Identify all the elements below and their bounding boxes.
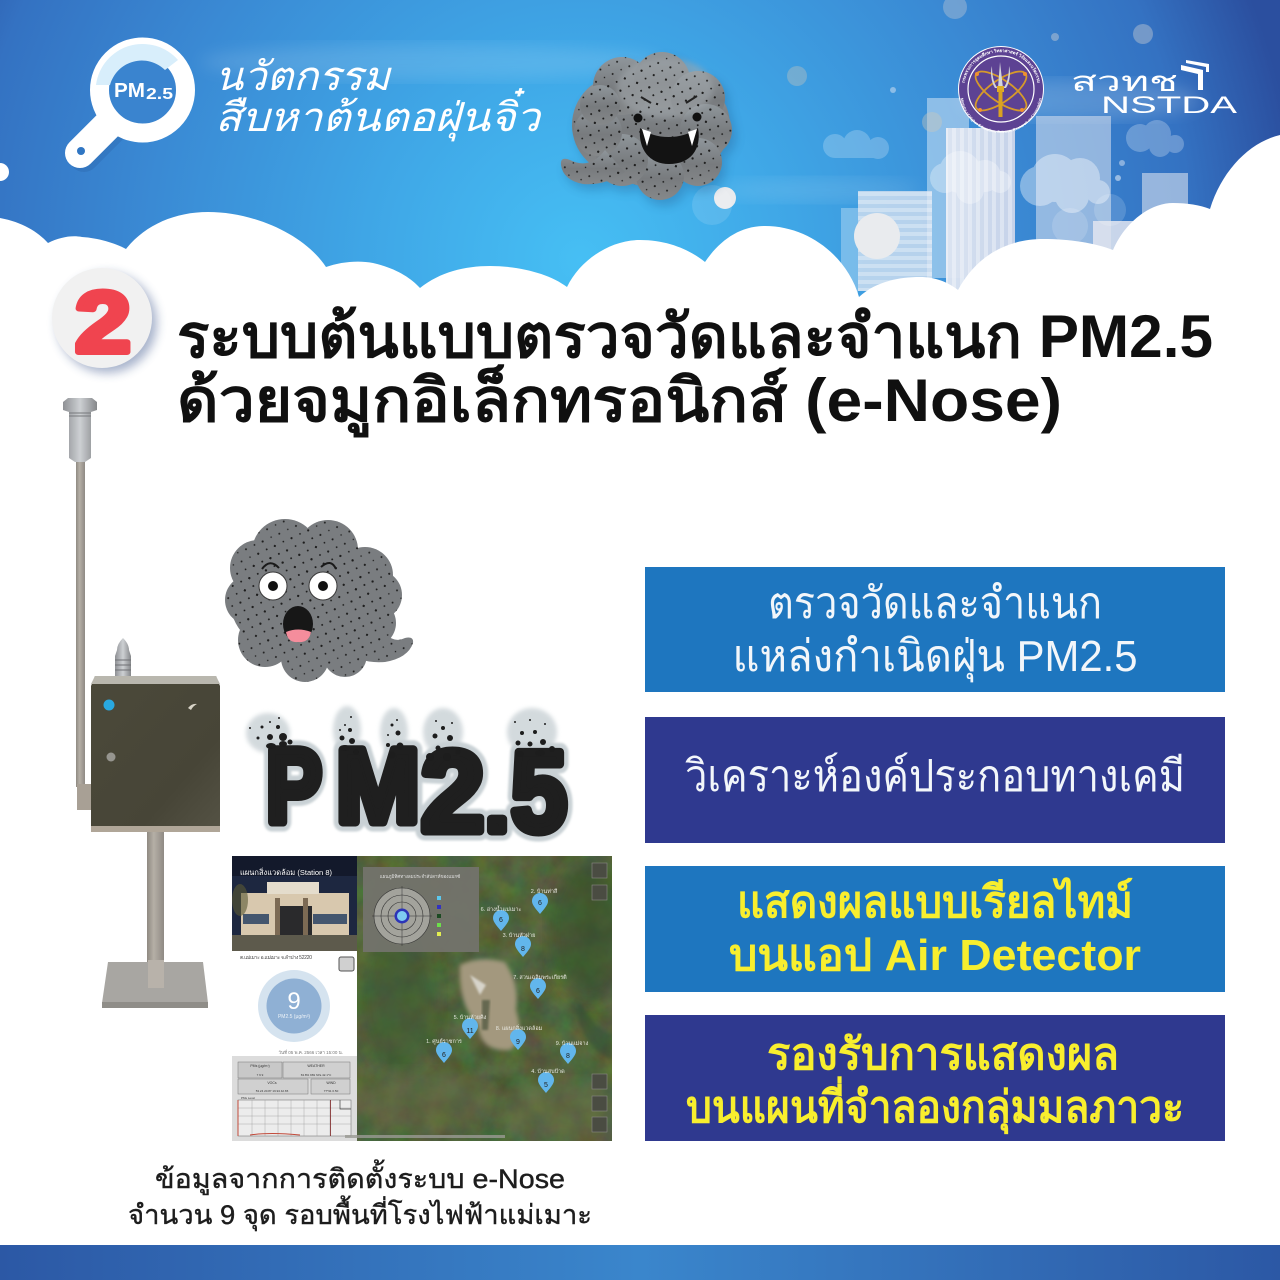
feature box: measure and classify: แหล่งกำเนิดฝุ่น PM2.5 [732, 632, 1138, 683]
header title: สืบหาต้นตอฝุ่นจิ๋ว [215, 88, 543, 142]
map satellite view [350, 856, 630, 1141]
photo caption: จำนวน 9 จุด รอบพื้นที่โรงไฟฟ้าแม่เมาะ [128, 1195, 592, 1232]
feature box: simulation map [645, 1015, 1225, 1141]
main heading: ด้วยจมูกอิเล็กทรอนิกส์ (e-Nose) [177, 364, 1062, 438]
map pins: 6 [536, 988, 540, 995]
bottom band [0, 1245, 1280, 1280]
map pins: 6 [442, 1052, 446, 1059]
map pins: 6 [538, 900, 542, 907]
PM2.5 reading panel: ต.แม่เมาะ อ.แม่เมาะ จ.ลำปาง 52220 [240, 955, 312, 961]
map scrollbar [345, 1135, 505, 1138]
sensor chart panel: VOCs [267, 1081, 277, 1085]
main heading [177, 303, 1213, 438]
map pins [426, 888, 589, 1093]
NSTDA logo: สวทช [1071, 66, 1178, 97]
sensor chart panel [232, 1056, 357, 1141]
wind rose panel [363, 867, 479, 952]
map pins: 7. สวนเฉลิมพระเกียรติ [513, 974, 567, 981]
surprised dust cloud mascot [225, 519, 413, 682]
map pins: 2. บ้านท่าสี [531, 888, 558, 895]
map pins: 4. บ้านสบป้าด [531, 1068, 565, 1075]
feature box: measure and classify [645, 567, 1225, 692]
PM2.5 graphic lettering: M [336, 728, 420, 845]
ministry seal logo: กระทรวงการอุดมศึกษา วิทยาศาสตร์ วิจัยและนวัตกรรม [962, 48, 1040, 83]
PM2.5 graphic lettering: 2 [421, 729, 484, 856]
map pins: 6 [499, 917, 503, 924]
magnifier logo [77, 44, 186, 157]
header title: นวัตกรรม [215, 55, 393, 99]
PM2.5 graphic lettering: P [266, 728, 322, 845]
PM2.5 graphic lettering: 5 [511, 729, 567, 856]
station photo: แผนกสิ่งแวดล้อม (Station 8) [240, 867, 332, 877]
PM2.5 graphic lettering [246, 706, 567, 856]
PM2.5 reading panel [232, 951, 357, 1056]
wind rose panel: แผนภูมิทิศทางลมประจำสัปดาห์ของแมกซ์ [380, 873, 460, 880]
e-Nose device photo [63, 398, 220, 1008]
NSTDA logo [1071, 60, 1237, 119]
station photo [232, 856, 357, 951]
PM2.5 graphic lettering: . [486, 759, 508, 848]
photo caption: ข้อมูลจากการติดตั้งระบบ e-Nose [155, 1159, 565, 1195]
dashboard screenshot [232, 856, 630, 1141]
photo caption [128, 1159, 592, 1232]
magnifier logo: PM [114, 80, 145, 102]
map pins: 8 [566, 1053, 570, 1060]
PM2.5 graphic lettering: P [266, 728, 322, 845]
feature box: realtime app: บนแอป Air Detector [729, 931, 1141, 980]
header title [215, 55, 543, 142]
map pins: 8. แผนกสิ่งแวดล้อม [496, 1024, 543, 1032]
feature box: realtime app [645, 866, 1225, 992]
number badge 2: 2 [75, 275, 131, 371]
feature box: realtime app: แสดงผลแบบเรียลไทม์ [737, 876, 1133, 927]
map pins: 5. บ้านห้วยคิง [454, 1014, 487, 1021]
NSTDA logo: NSTDA [1101, 92, 1237, 119]
magnifier logo: 2.5 [146, 86, 173, 103]
main heading: ระบบต้นแบบตรวจวัดและจำแนก PM2.5 [177, 303, 1213, 370]
small background clouds [823, 120, 1184, 244]
map toolbar icons [592, 863, 607, 1132]
sensor chart panel: PMs (µg/m³) [250, 1064, 270, 1068]
PM2.5 reading panel: PM2.5 (µg/m³) [278, 1014, 310, 1020]
feature box: chemical analysis [645, 717, 1225, 843]
feature box: measure and classify: ตรวจวัดและจำแนก [768, 579, 1102, 628]
sensor chart panel: 7 9 9 [257, 1073, 264, 1077]
PM2.5 graphic lettering: 2 [421, 729, 484, 856]
map pins: 5 [544, 1082, 548, 1089]
PM2.5 graphic lettering: 5 [511, 729, 567, 856]
map pins: 3. บ้านหัวฝาย [503, 932, 535, 939]
sensor chart panel: WEATHER [307, 1064, 325, 1068]
city buildings [841, 98, 1188, 298]
ministry seal logo [958, 46, 1044, 133]
PM2.5 graphic lettering: M [336, 728, 420, 845]
sensor chart panel: WIND [326, 1081, 336, 1085]
map pins: 8 [521, 946, 525, 953]
map pins: 6. อ่างน้ำแม่เมาะ [481, 905, 521, 913]
number badge 2 [52, 268, 157, 373]
header sky panel [0, 0, 1280, 310]
map pins: 9 [516, 1039, 520, 1046]
PM2.5 graphic lettering: . [486, 759, 508, 848]
feature box: chemical analysis: วิเคราะห์องค์ประกอบทางเคมี [685, 752, 1185, 801]
bokeh bubbles [0, 0, 1153, 259]
sensor chart panel: 63.8% 969 hPa 42.1°C [301, 1073, 332, 1077]
angry dust cloud mascot [561, 52, 736, 206]
PM2.5 reading panel: 9 [287, 988, 301, 1015]
ministry seal logo: Ministry of Higher Education, Science, Research and Innovation [960, 98, 1042, 133]
map pins: 9. บ้านแม่จาง [556, 1040, 589, 1047]
sensor chart panel: 53.24 20.87 19.94 42.65 [256, 1089, 289, 1093]
sensor chart panel: PMs Level [241, 1096, 255, 1100]
sensor chart panel: 77°91 0.50 [324, 1089, 339, 1093]
map pins: 1. ศูนย์ราชการ [426, 1038, 462, 1045]
feature box: simulation map: บนแผนที่จำลองกลุ่มมลภาวะ [686, 1076, 1184, 1135]
map pins: 11 [466, 1028, 474, 1035]
PM2.5 reading panel: วันที่ 05 พ.ค. 2566 เวลา 15:00 น. [278, 1049, 343, 1055]
feature box: simulation map: รองรับการแสดงผล [767, 1030, 1119, 1079]
